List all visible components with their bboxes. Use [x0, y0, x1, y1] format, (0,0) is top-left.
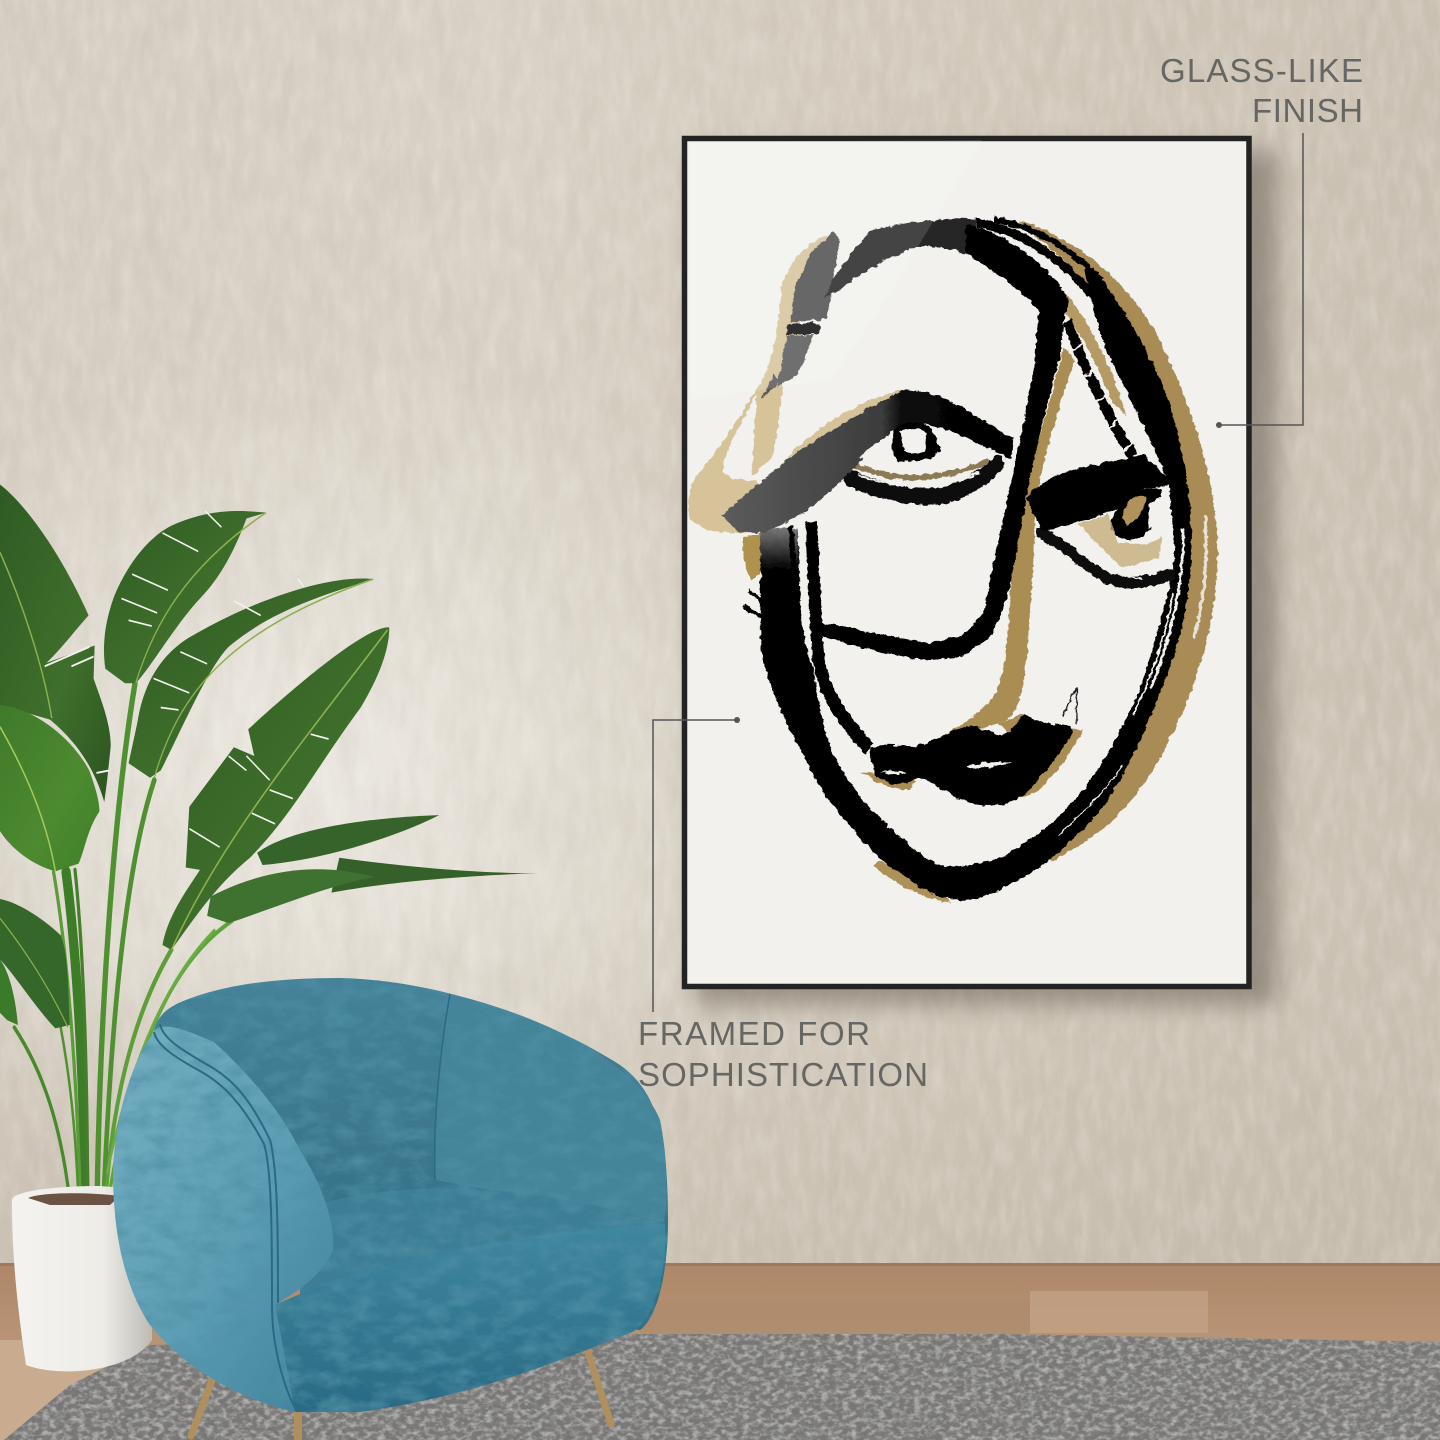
gold nose stroke — [930, 347, 1075, 742]
chair legs — [191, 1346, 611, 1440]
floor — [0, 1263, 1440, 1440]
lips — [869, 713, 1073, 805]
leaf large right — [162, 627, 389, 950]
framed artwork — [684, 138, 1249, 986]
leader dot — [734, 717, 740, 723]
rug — [4, 1334, 1440, 1440]
chair arm — [113, 1027, 333, 1412]
black neck under glass — [760, 528, 798, 570]
leaf lower near — [207, 869, 375, 923]
leaf top left — [0, 485, 111, 802]
right brow — [1026, 455, 1175, 532]
gold outer crescent — [1019, 221, 1218, 861]
black inner left line — [744, 521, 1076, 749]
black strands upper right — [976, 219, 1134, 457]
chair back — [152, 978, 668, 1330]
leaf front bright — [0, 705, 99, 871]
leaf lower upper right — [257, 815, 439, 865]
right eye lower lid — [1041, 533, 1171, 582]
black top of head — [825, 219, 976, 299]
heading: framed for sophistication — [638, 1015, 928, 1093]
heading: glass-like finish — [1160, 52, 1363, 129]
leaf lower left — [0, 899, 70, 1028]
glass reflection — [690, 140, 982, 400]
gold hat stroke — [688, 234, 909, 533]
black hat shape under glass — [760, 233, 839, 400]
gold neck patch — [742, 532, 767, 581]
plant pot — [12, 1186, 152, 1371]
chair front — [275, 1224, 665, 1412]
ring dry-brush streaks — [1059, 517, 1206, 836]
heading: glass-like finish: GLASS-LIKE — [1160, 52, 1363, 89]
left iris — [859, 423, 984, 468]
heading: framed for sophistication: SOPHISTICATION — [638, 1056, 928, 1093]
black main ring — [760, 262, 1192, 900]
right iris — [1078, 488, 1166, 567]
black nose line — [821, 310, 1065, 661]
leader line — [653, 720, 737, 1012]
leaf upright centre — [104, 511, 266, 683]
stems — [14, 683, 232, 1202]
leaf far left — [0, 960, 18, 1025]
left eye lower lid — [850, 462, 998, 497]
gold hair strand — [1048, 278, 1126, 416]
annotation: framed for sophistication — [638, 717, 928, 1093]
chair piping — [154, 994, 450, 1412]
leaf middle right — [129, 578, 373, 778]
leader dot — [1216, 422, 1222, 428]
armchair — [113, 978, 668, 1440]
frame and canvas — [684, 138, 1249, 986]
abstract face painting — [688, 219, 1218, 903]
leader line — [1219, 133, 1303, 425]
leaf lower long right — [331, 858, 537, 893]
plant — [0, 485, 537, 1202]
heading: glass-like finish: FINISH — [1252, 92, 1363, 129]
chair seat — [300, 1189, 665, 1310]
frame shadow — [695, 150, 1277, 1005]
annotation: glass-like finish — [1160, 52, 1363, 428]
chair body — [113, 978, 668, 1412]
left brow — [721, 389, 1014, 533]
heading: framed for sophistication: FRAMED FOR — [638, 1015, 870, 1052]
